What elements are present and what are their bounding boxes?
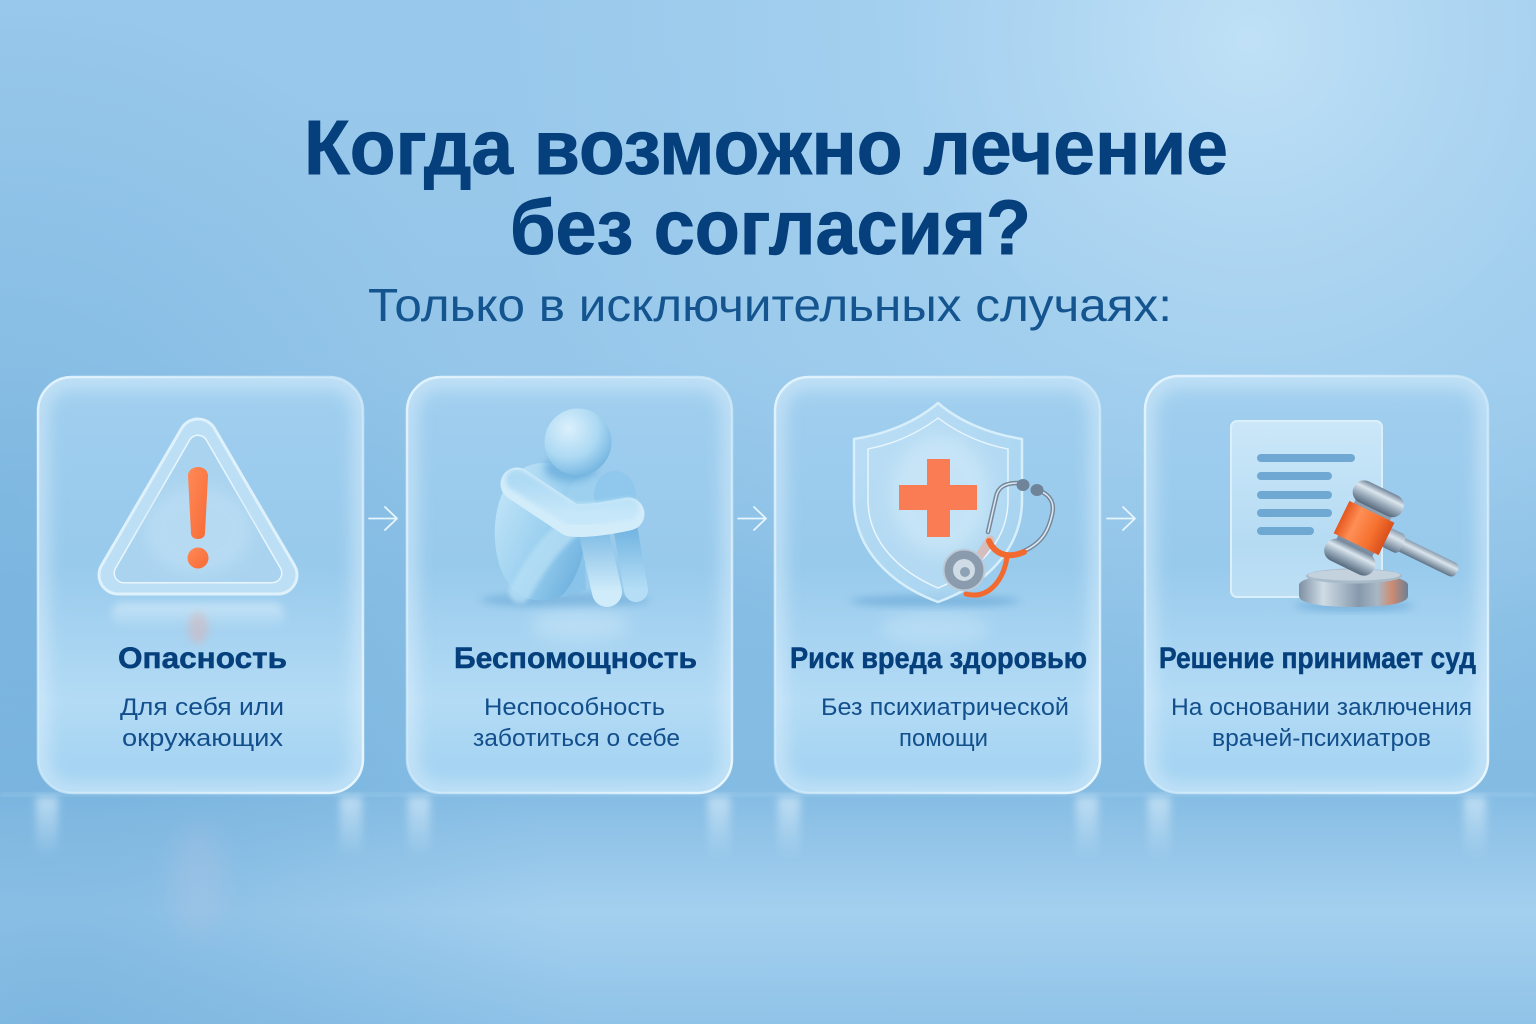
text: health risk description — [821, 694, 1069, 752]
title: без согласия? — [510, 185, 1031, 271]
text: health risk description: помощи — [899, 725, 988, 752]
heading: danger: Опасность — [118, 642, 287, 675]
text: court decision description — [1171, 694, 1472, 752]
panel: helplessness — [407, 377, 732, 793]
panel: danger — [38, 377, 363, 793]
text: health risk description: Без психиатрической — [821, 694, 1069, 721]
title: Когда возможно лечение — [304, 105, 1228, 191]
text: helplessness description — [473, 694, 680, 752]
text: helplessness description: Неспособность — [484, 694, 665, 721]
title — [304, 105, 1228, 271]
subtitle: Только в исключительных случаях: — [368, 279, 1172, 331]
heading: health risk: Риск вреда здоровью — [790, 642, 1087, 675]
panel: court decision — [1145, 376, 1488, 793]
text: danger description — [120, 694, 284, 752]
arrow 3 — [1107, 507, 1135, 530]
text: danger description: окружающих — [122, 725, 283, 752]
text: court decision description: врачей-психиатров — [1212, 725, 1431, 752]
arrow 2 — [738, 507, 766, 530]
heading: helplessness: Беспомощность — [454, 642, 697, 675]
panel: health risk — [775, 377, 1100, 793]
icon: gavel — [1294, 477, 1476, 613]
icon: warning triangle — [112, 438, 284, 644]
arrow 1 — [369, 507, 397, 530]
icon: seated person — [480, 408, 650, 641]
heading: court decision: Решение принимает суд — [1159, 642, 1476, 675]
icon: document — [1231, 421, 1382, 597]
stethoscope — [966, 483, 1053, 595]
floor reflections — [36, 797, 1486, 935]
text: danger description: Для себя или — [120, 694, 284, 721]
text: helplessness description: заботиться о себе — [473, 725, 680, 752]
icon: shield with cross and stethoscope — [850, 403, 1053, 644]
text: court decision description: На основании заключения — [1171, 694, 1472, 721]
